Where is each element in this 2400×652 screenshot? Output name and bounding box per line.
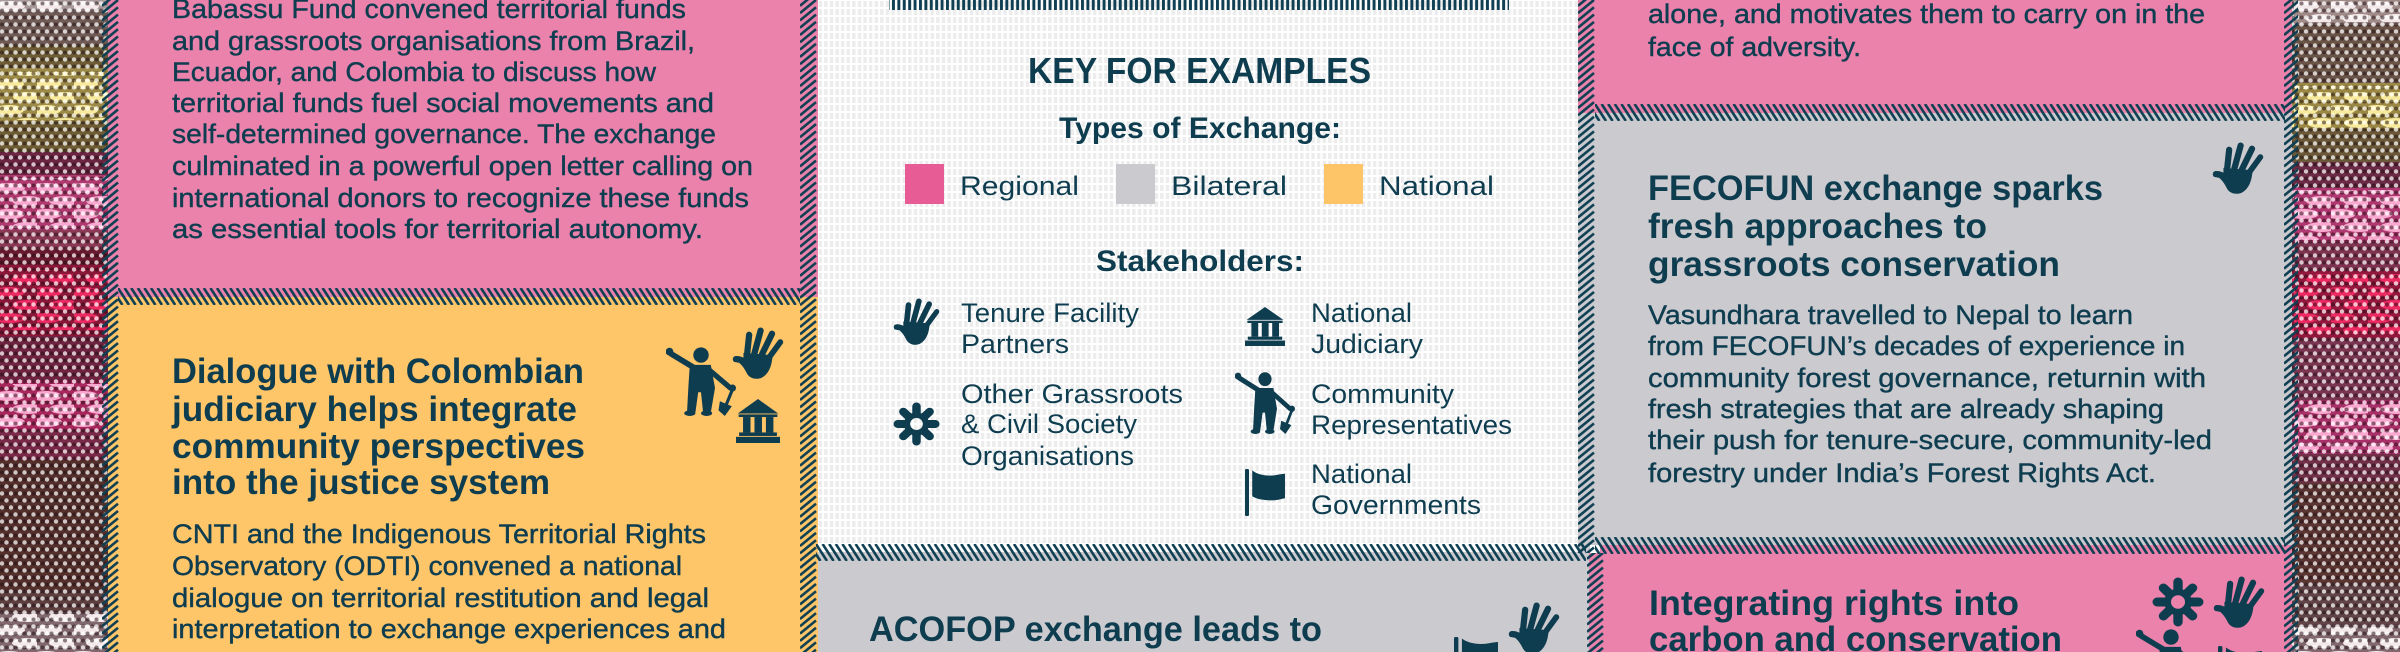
text block: closing text	[1648, 0, 2205, 62]
heading: FECOFUN exchange	[1648, 169, 2103, 284]
woven fabric strip: left	[0, 0, 108, 652]
subheading: stakeholders: Stakeholders:	[1096, 245, 1304, 278]
heading: Dialogue with Colombian judiciary	[171, 352, 585, 502]
panel: key for examples	[818, 0, 1578, 544]
stakeholder: other grassroots and civil society organisations	[898, 379, 1183, 471]
heading: Dialogue with Colombian judiciary: Dialogue with Colombian	[172, 352, 584, 391]
heading: FECOFUN exchange: fresh approaches to	[1648, 207, 1987, 246]
legend: bilateral	[1116, 164, 1287, 204]
stakeholder: national governments: Governments	[1311, 490, 1481, 520]
stakeholder: other grassroots and civil society organisations: Organisations	[961, 441, 1134, 471]
icon group: flag and hand	[1454, 606, 1556, 652]
panel: regional exchange closing text	[1590, 0, 2292, 113]
legend: regional: Regional	[960, 171, 1079, 201]
text block: Colombian judiciary body: dialogue on territorial restitution and legal	[172, 583, 709, 613]
legend: national: National	[1379, 171, 1494, 201]
stakeholder: community representatives	[1235, 372, 1512, 440]
stakeholder: tenure facility partners: Partners	[961, 329, 1069, 359]
text block: Babassu Fund body: international donors to recognize these funds	[172, 183, 749, 213]
text block: closing text: face of adversity.	[1648, 32, 1861, 62]
subheading: types of exchange: Types of Exchange:	[1059, 112, 1341, 145]
heading: FECOFUN exchange: grassroots conservation	[1648, 245, 2060, 284]
text block: Colombian judiciary body: Observatory (ODTI) convened a national	[172, 551, 682, 581]
text block: FECOFUN body: community forest governance, returnin with	[1648, 363, 2206, 393]
text block: Babassu Fund body: culminated in a powerful open letter calling on	[172, 151, 753, 181]
stakeholder: community representatives: Representatives	[1311, 410, 1512, 440]
icon: hand	[2213, 146, 2260, 194]
legend: bilateral: Bilateral	[1171, 171, 1287, 201]
heading: integrating rights	[1649, 584, 2062, 652]
stakeholder: national judiciary: National	[1311, 298, 1412, 328]
text block: Colombian judiciary body: CNTI and the Indigenous Territorial Rights	[172, 519, 706, 549]
text block: Babassu Fund body: Ecuador, and Colombia to discuss how	[172, 57, 657, 87]
text block: FECOFUN body: fresh strategies that are already shaping	[1648, 394, 2164, 424]
text block: FECOFUN body: Vasundhara travelled to Nepal to learn	[1648, 300, 2133, 330]
stakeholder: national judiciary	[1245, 298, 1424, 359]
legend: national	[1324, 164, 1494, 204]
stakeholder: other grassroots and civil society organisations: & Civil Society	[961, 409, 1138, 439]
text block: Babassu Fund body	[172, 0, 753, 244]
heading: integrating rights: Integrating rights into	[1649, 584, 2019, 623]
stakeholder: national governments: National	[1311, 459, 1412, 489]
heading: key for examples: KEY FOR EXAMPLES	[1028, 50, 1371, 91]
stakeholder: national governments	[1245, 459, 1481, 520]
panel: Colombian judiciary national exchange	[108, 297, 810, 652]
text block: FECOFUN body: their push for tenure-secure, community-led	[1648, 425, 2212, 455]
woven fabric strip: right	[2292, 0, 2400, 652]
icon group: person, hand, bank	[666, 331, 780, 443]
heading: FECOFUN exchange: FECOFUN exchange sparks	[1648, 169, 2103, 208]
heading: Dialogue with Colombian judiciary: judiciary helps integrate	[171, 390, 577, 429]
heading: Dialogue with Colombian judiciary: community perspectives	[172, 427, 585, 466]
stakeholder: other grassroots and civil society organisations: Other Grassroots	[961, 379, 1183, 409]
panel: Babassu Fund regional exchange	[108, 0, 810, 297]
text block: Colombian judiciary body: interpretation to exchange experiences and	[172, 614, 726, 644]
icon group: flower, hand, person, flag	[2136, 580, 2262, 652]
text block: Babassu Fund body: and grassroots organisations from Brazil,	[172, 26, 695, 56]
text block: Babassu Fund body: as essential tools for territorial autonomy.	[172, 214, 703, 244]
text block: Babassu Fund body: self-determined governance. The exchange	[172, 119, 716, 149]
panel: FECOFUN bilateral exchange	[1590, 113, 2292, 545]
text block: FECOFUN body: forestry under India’s Forest Rights Act.	[1648, 458, 2156, 488]
stakeholder: tenure facility partners: Tenure Facility	[961, 298, 1139, 328]
legend: regional	[905, 164, 1079, 204]
text block: Colombian judiciary body	[172, 519, 726, 644]
stakeholder: tenure facility partners	[894, 298, 1139, 359]
panel: ACOFOP bilateral exchange	[815, 552, 1589, 652]
text block: Babassu Fund body: territorial funds fuel social movements and	[172, 88, 714, 118]
panel: integrating rights regional exchange	[1600, 545, 2292, 652]
heading: ACOFOP exchange: ACOFOP exchange leads to	[869, 610, 1322, 649]
text block: FECOFUN body: from FECOFUN’s decades of experience in	[1648, 331, 2185, 361]
heading: Dialogue with Colombian judiciary: into the justice system	[172, 463, 550, 502]
stakeholder: community representatives: Community	[1311, 379, 1455, 409]
stakeholder: national judiciary: Judiciary	[1311, 329, 1424, 359]
text block: FECOFUN body	[1648, 300, 2212, 488]
